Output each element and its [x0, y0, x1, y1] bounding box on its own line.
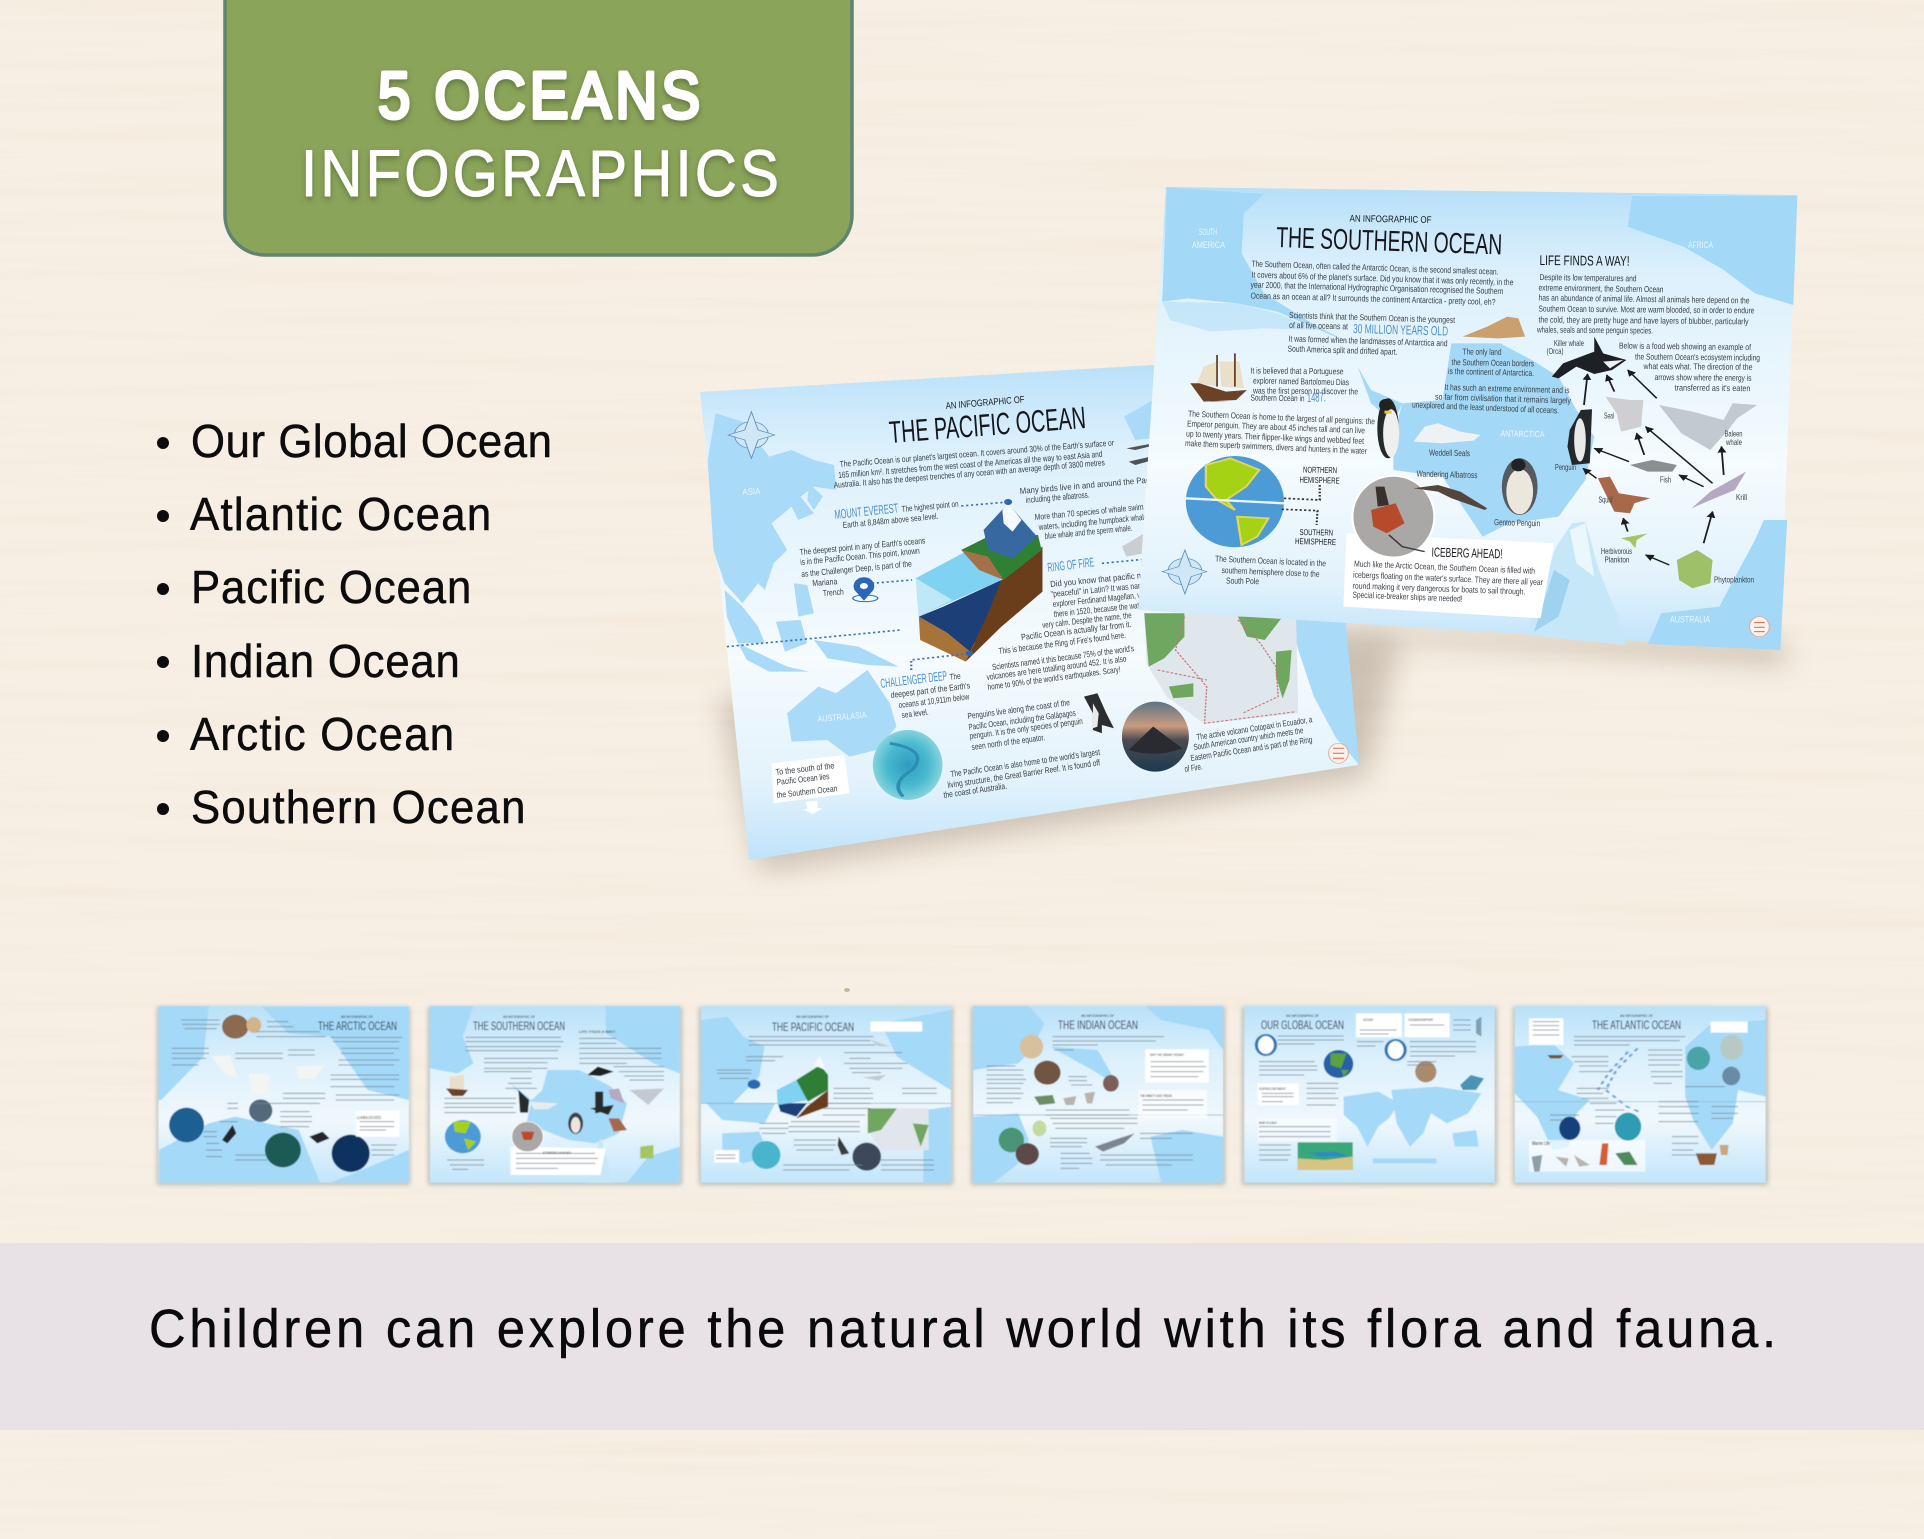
Pacific text blocks: including the albatross.	[1025, 489, 1090, 505]
Southern text blocks: has an abundance of animal life. Almost all animals here depend on the	[1538, 293, 1750, 305]
Southern text blocks: (Orca)	[1546, 346, 1564, 356]
Pacific text blocks: is in the Pacific Ocean. This point, known	[800, 546, 920, 567]
Pacific text blocks: MOUNT EVEREST	[834, 500, 899, 522]
gentoo penguin	[1502, 458, 1538, 515]
thumbnail: Our Global Ocean: OCEAN	[1363, 1017, 1373, 1022]
Pacific text blocks: Trench	[822, 587, 844, 598]
Southern text blocks: year 2000, that the International Hydrographic Organisation recognised the Southern	[1250, 280, 1504, 296]
Pacific text blocks: Penguins live along the coast of the	[967, 697, 1071, 721]
inset map: ring of fire	[1144, 613, 1298, 724]
globe: hemispheres	[1186, 456, 1284, 547]
Southern text blocks: Southern Ocean to survive. Most are warm blooded, so in order to endure	[1538, 304, 1755, 315]
thumbnail: Indian Ocean	[971, 1006, 1225, 1185]
Pacific text blocks: The Pacific Ocean is also home to the world's largest	[950, 747, 1101, 779]
Southern text blocks: explorer named Bartolomeu Dias	[1253, 376, 1349, 387]
thumbnail: Our Global Ocean: OCEANOGRAPHER	[1408, 1017, 1433, 1022]
emperor penguin	[1377, 398, 1399, 458]
Southern text blocks: Special ice-breaker ships are needed!	[1352, 590, 1463, 604]
Southern text blocks: Herbivorous	[1601, 546, 1632, 556]
thumbnail: Our Global Ocean: WHAT IS A SEA?	[1259, 1120, 1277, 1125]
walrus	[1463, 317, 1525, 338]
Pacific text blocks: as the Challenger Deep, is part of the	[801, 558, 912, 579]
Pacific text blocks: "peaceful" in Latin? It was named by	[1050, 578, 1161, 599]
Pacific text blocks: The	[949, 671, 961, 682]
Pacific text blocks: oceans at 10,911m below	[898, 691, 970, 710]
Pacific text blocks: Scientists named it this because 75% of the world's	[991, 643, 1135, 672]
Pacific text blocks	[742, 437, 1313, 800]
Pacific text blocks: Mariana	[812, 576, 838, 588]
thumbnail: Pacific Ocean: THE PACIFIC OCEAN	[772, 1020, 854, 1034]
Southern text blocks: southern hemisphere close to the	[1221, 565, 1320, 579]
thumbnail: Arctic Ocean: LANDLOCKED	[357, 1115, 382, 1120]
bullet list of oceans: Arctic Ocean	[190, 708, 454, 760]
Pacific text blocks: blue whale and the sperm whale.	[1044, 523, 1133, 541]
thumbnail: Indian Ocean: WHY THE 'INDIAN' OCEAN?	[1150, 1052, 1185, 1057]
Southern text blocks: transferred as it's eaten	[1674, 383, 1751, 393]
caption band: Children can explore the natural world with its flora and fauna.	[149, 1300, 1776, 1359]
Southern text blocks: of all five oceans at	[1289, 320, 1349, 331]
Southern text blocks: up to twenty years. Their flipper-like wings and webbed feet	[1186, 429, 1365, 446]
Southern text blocks: South America split and drifted apart.	[1287, 344, 1398, 357]
thumbnail: Pacific Ocean	[699, 1006, 953, 1185]
Pacific text blocks: seen north of the equator.	[971, 732, 1046, 752]
thumbnail: Arctic Ocean: THE ARCTIC OCEAN	[318, 1019, 397, 1033]
thumbnail: Atlantic Ocean: THE ATLANTIC OCEAN	[1592, 1018, 1681, 1032]
Pacific text blocks: of Fire.	[1184, 761, 1203, 774]
Southern text blocks: It was formed when the landmasses of Antarctica and	[1288, 334, 1448, 348]
Southern text blocks: AUSTRALIA	[1670, 614, 1710, 624]
Pacific text blocks: volcanoes are here totalling around 452. It is also	[986, 653, 1127, 682]
bullet list of oceans: Indian Ocean	[191, 635, 460, 687]
Southern text blocks: unexplored and the least understood of all oceans.	[1412, 400, 1559, 415]
Southern title: LIFE FINDS A WAY!	[1539, 252, 1630, 269]
Southern text blocks: Fish	[1660, 474, 1671, 484]
Pacific text blocks: living structure, the Great Barrier Reef. It is found off	[947, 757, 1101, 790]
Pacific text blocks: very calm. Despite the name, the	[1042, 610, 1132, 630]
Pacific text blocks: home to 90% of the world's earthquakes. Scary!	[987, 664, 1121, 692]
volcano photo	[1122, 702, 1189, 772]
title panel: INFOGRAPHICS	[301, 138, 779, 211]
Southern title: SOUTHERN	[1299, 527, 1333, 538]
block diagram	[916, 499, 1042, 662]
iceberg illustration	[1527, 522, 1626, 645]
Southern text blocks: The Southern Ocean, often called the Antarctic Ocean, is the second smallest ocean.	[1251, 259, 1499, 277]
thumbnail: Our Global Ocean: SUPERCONTINENT	[1259, 1086, 1286, 1091]
Pacific text blocks: Australia. It also has the deepest trenches of any ocean with an average depth of 3800 metres	[833, 457, 1105, 490]
Southern text blocks: It covers about 6% of the planet's surface. Did you know that it was only recently, in the	[1251, 270, 1514, 287]
Southern text blocks: Southern Ocean in	[1250, 393, 1305, 403]
thumbnail: Southern Ocean: AN INFOGRAPHIC OF	[503, 1015, 535, 1019]
Pacific text blocks: The highest point on	[901, 499, 959, 514]
Southern text blocks: Squid	[1598, 494, 1613, 504]
Southern text blocks: Plankton	[1604, 554, 1630, 564]
Pacific text blocks: waters, including the humpback whale, blue	[1037, 510, 1164, 532]
Southern text blocks: Despite its low temperatures and	[1539, 272, 1637, 283]
Southern text blocks: extreme environment, the Southern Ocean	[1538, 283, 1664, 294]
thumbnail: Pacific Ocean: AN INFOGRAPHIC OF	[796, 1015, 829, 1019]
Pacific text blocks: Pacific Ocean is actually far from it.	[1021, 619, 1132, 642]
Pacific text blocks: South American country which meets the	[1193, 725, 1304, 752]
Southern text blocks: Gentoo Penguin	[1494, 517, 1540, 528]
thumbnail: Arctic Ocean: AN INFOGRAPHIC OF	[341, 1015, 373, 1019]
Pacific text blocks: deepest part of the Earth's	[890, 680, 971, 700]
Southern text blocks: Scientists think that the Southern Ocean is the youngest	[1289, 310, 1456, 325]
Pacific text blocks: the Southern Ocean	[776, 783, 838, 800]
panel: Pacific Ocean sheet	[700, 356, 1359, 860]
Pacific text blocks: sea level.	[901, 707, 929, 720]
Southern text blocks: 1487.	[1307, 389, 1326, 405]
Southern text blocks: The Southern Ocean is located in the	[1215, 554, 1326, 568]
thumbnail: Indian Ocean: THE NINETY EAST RIDGE	[1140, 1093, 1172, 1098]
Pacific title: AN INFOGRAPHIC OF	[945, 394, 1025, 412]
Southern text blocks: Much like the Arctic Ocean, the Southern Ocean is filled with	[1354, 559, 1535, 576]
Pacific text blocks: To the south of the	[775, 760, 835, 777]
Pacific text blocks: CHALLENGER DEEP	[880, 668, 948, 691]
seal	[1413, 423, 1480, 443]
thumbnail: Our Global Ocean	[1242, 1006, 1497, 1185]
Southern text blocks: Wandering Albatross	[1416, 469, 1478, 480]
Southern text blocks: South Pole	[1226, 576, 1259, 586]
Southern title: ICEBERG AHEAD!	[1431, 545, 1503, 561]
shadow under large sheets	[720, 620, 1790, 872]
Pacific text blocks: Pacific Ocean, including the Galápagos	[968, 708, 1076, 732]
thumbnail: Indian Ocean: AN INFOGRAPHIC OF	[1081, 1014, 1114, 1018]
Southern text blocks: Penguin	[1555, 462, 1576, 472]
Southern text blocks: what eats what. The direction of the	[1643, 361, 1753, 372]
ice breaker photo	[1352, 476, 1434, 557]
Southern text blocks: It has such an extreme environment and is	[1444, 382, 1570, 395]
Southern text blocks: Weddell Seals	[1429, 448, 1470, 458]
Southern text blocks: the cold, they are pretty huge and have layers of blubber, particularly	[1538, 315, 1749, 326]
Pacific text blocks: there in 1520, because the waters were	[1053, 598, 1164, 619]
Pacific text blocks: The Pacific Ocean is our planet's largest ocean. It covers around 30% of the Earth's surface or	[839, 437, 1114, 469]
bullet list of oceans: Atlantic Ocean	[190, 488, 491, 540]
thumbnail: Arctic Ocean	[157, 1006, 410, 1185]
Southern text blocks: make them superb swimmers, divers and hunters in the water	[1185, 438, 1367, 456]
title panel: 5 OCEANS	[378, 60, 700, 133]
Southern text blocks: SOUTH	[1199, 227, 1217, 237]
Pacific title: THE PACIFIC OCEAN	[888, 400, 1087, 450]
Pacific text blocks: penguin. It is the only species of penguin	[969, 716, 1083, 741]
Pacific text blocks: Pacific Ocean lies	[776, 771, 830, 787]
Pacific text blocks: Many birds live in and around the Pacific Ocean	[1019, 472, 1185, 496]
Southern text blocks: was the first person to discover the	[1252, 385, 1358, 396]
Southern title	[1276, 214, 1630, 561]
Southern text blocks: It is believed that a Portuguese	[1250, 366, 1344, 376]
Pacific title	[888, 394, 1087, 450]
Pacific text blocks: 165 million km². It stretches from the west coast of the Americas all the way to east Asia and	[838, 449, 1103, 480]
thumbnail: Southern Ocean: LIFE FINDS A WAY!	[579, 1029, 615, 1034]
Southern text blocks	[1185, 227, 1760, 624]
Southern text blocks: Ocean as an ocean at all? It surrounds the continent Antarctica - pretty cool, eh?	[1250, 291, 1496, 307]
food web arrows	[1583, 370, 1724, 565]
Southern title: AN INFOGRAPHIC OF	[1349, 214, 1432, 226]
white box: iceberg ahead	[1343, 533, 1554, 618]
map and illustrations of Pacific sheet	[708, 400, 1359, 814]
thumbnail: Our Global Ocean: AN INFOGRAPHIC OF	[1286, 1014, 1319, 1018]
Southern text blocks: icebergs floating on the water's surface. They are there all year	[1353, 570, 1543, 587]
Southern text blocks: Krill	[1736, 492, 1747, 502]
Pacific text blocks: Did you know that pacific means	[1050, 568, 1160, 589]
Southern text blocks: whale	[1725, 437, 1742, 447]
Southern text blocks: Emperor penguin. They are about 45 inches tall and can live	[1187, 419, 1365, 435]
thumbnail: Atlantic Ocean: AN INFOGRAPHIC OF	[1620, 1014, 1653, 1018]
Southern text blocks: The only land	[1462, 347, 1502, 357]
Pacific text blocks: This is because the Ring of Fire's found here.	[998, 630, 1126, 656]
title panel	[225, 0, 852, 255]
Southern text blocks: the Southern Ocean's ecosystem including	[1635, 352, 1760, 363]
Pacific text blocks: AUSTRALASIA	[817, 710, 867, 724]
Southern text blocks: The Southern Ocean is home to the largest of all penguins: the	[1188, 409, 1375, 426]
bullet list of oceans	[157, 415, 552, 833]
thumbnail: Southern Ocean: THE SOUTHERN OCEAN	[473, 1019, 565, 1033]
Southern title: THE SOUTHERN OCEAN	[1276, 222, 1503, 261]
panel: Southern Ocean sheet	[1138, 187, 1797, 650]
Southern text blocks: 30 MILLION YEARS OLD	[1353, 321, 1448, 338]
Pacific text blocks: ASIA	[742, 486, 761, 497]
icon: compass	[728, 412, 775, 458]
thumbnail: Atlantic Ocean	[1513, 1006, 1768, 1185]
thumbnail: Our Global Ocean: OUR GLOBAL OCEAN	[1261, 1018, 1344, 1032]
Southern text blocks: round making it very dangerous for boats to sail through.	[1352, 581, 1526, 597]
Southern text blocks: AFRICA	[1688, 240, 1713, 250]
thumbnail: Southern Ocean	[428, 1006, 682, 1185]
Pacific text blocks: explorer Ferdinand Magellan, who was	[1052, 588, 1163, 609]
Pacific text blocks: Eastern Pacific Ocean and is part of the Ring	[1190, 734, 1313, 763]
bullet list of oceans: Pacific Ocean	[191, 561, 471, 613]
albatross and whale	[1122, 443, 1153, 557]
Southern text blocks: whales, seals and some penguin species.	[1536, 324, 1653, 336]
Southern text blocks: Killer whale	[1554, 338, 1584, 348]
Southern text blocks: AMERICA	[1192, 240, 1225, 250]
icon: location pin	[853, 577, 878, 602]
Pacific text blocks: RING OF FIRE	[1047, 554, 1095, 575]
Southern text blocks: Phytoplankton	[1714, 574, 1754, 584]
thumbnail: Indian Ocean: THE INDIAN OCEAN	[1058, 1018, 1138, 1032]
Southern text blocks: Baleen	[1724, 428, 1743, 438]
logo	[1750, 617, 1769, 637]
caption band	[0, 1243, 1924, 1430]
Pacific text blocks: the coast of Australia.	[943, 781, 1008, 800]
Southern text blocks: Below is a food web showing an example of	[1619, 341, 1752, 352]
Southern text blocks: the Southern Ocean borders	[1451, 357, 1534, 368]
Pacific text blocks: The active volcano Cotopaxi in Ecuador, a	[1196, 714, 1313, 742]
Pacific text blocks: More than 70 species of whale swim in its	[1034, 500, 1160, 522]
Southern text blocks: is the continent of Antarctica.	[1448, 366, 1534, 378]
Pacific text blocks: The deepest point in any of Earth's oceans	[799, 535, 926, 557]
Southern text blocks: ANTARCTICA	[1500, 429, 1545, 439]
south box	[772, 755, 850, 814]
icon: compass	[1162, 550, 1207, 594]
reef photo	[873, 730, 942, 800]
bullet list of oceans: Southern Ocean	[191, 781, 525, 833]
Southern title: HEMISPHERE	[1295, 536, 1336, 547]
Southern title: NORTHERN	[1303, 465, 1337, 475]
thumbnail: Southern Ocean: ICEBERG AHEAD!	[543, 1150, 571, 1155]
bullet list of oceans: Our Global Ocean	[191, 415, 552, 467]
Southern text blocks: Seal	[1604, 410, 1614, 420]
logo	[1329, 743, 1348, 763]
Southern title: HEMISPHERE	[1299, 475, 1340, 486]
food web animals	[1552, 337, 1757, 588]
thumbnail: Atlantic Ocean: Marine Life	[1532, 1141, 1550, 1147]
Southern text blocks: arrows show where the energy is	[1654, 372, 1752, 383]
penguin	[1084, 693, 1114, 733]
Southern text blocks: so far from civilisation that it remains largely	[1435, 392, 1572, 406]
albatross	[1413, 485, 1487, 510]
ship	[1190, 353, 1247, 402]
map and illustrations of Southern sheet	[1162, 187, 1797, 650]
Pacific text blocks: Earth at 8,848m above sea level.	[842, 511, 939, 530]
